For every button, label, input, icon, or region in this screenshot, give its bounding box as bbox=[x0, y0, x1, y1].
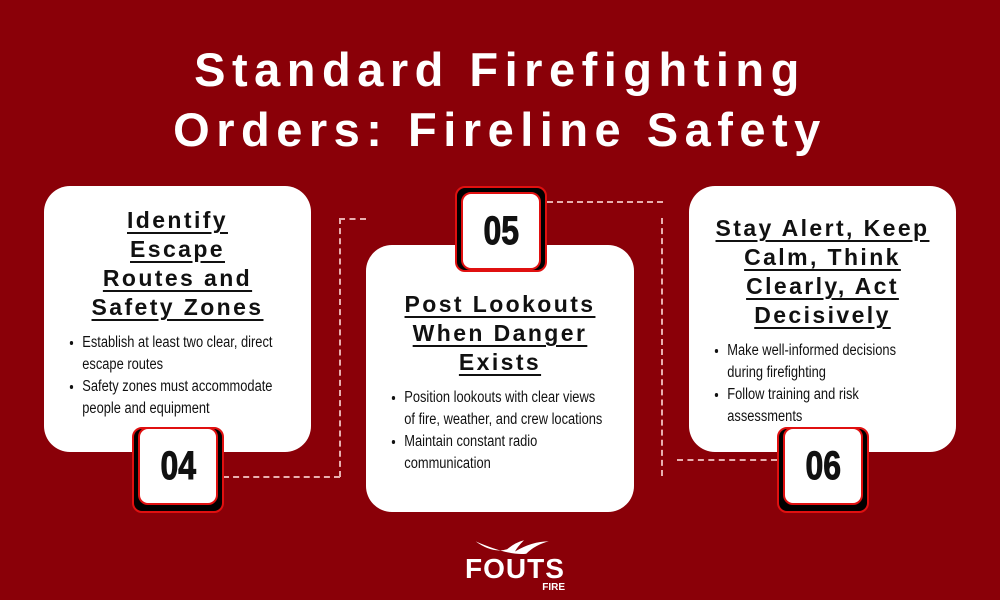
heading 06: Stay Alert, Keep bbox=[716, 215, 929, 241]
bullets 04: Establish at least two clear, direct escape routes bbox=[82, 334, 272, 373]
heading 05: Exists bbox=[459, 349, 541, 375]
bullets 04 bbox=[70, 334, 272, 417]
heading 04: Identify bbox=[127, 207, 228, 233]
bullets 05: Position lookouts with clear views of fire, weather, and crew locations bbox=[404, 389, 602, 428]
heading 04: Escape bbox=[130, 236, 225, 262]
heading 06: Decisively bbox=[754, 302, 891, 328]
number 06 bbox=[777, 427, 869, 513]
panel: card 04 bbox=[44, 186, 311, 452]
logo: FIRE bbox=[542, 582, 565, 593]
panel: card 05 bbox=[366, 245, 634, 512]
bullets 06 bbox=[714, 342, 896, 425]
logo bbox=[465, 540, 565, 593]
number 06: 06 bbox=[805, 444, 841, 488]
title: Standard Firefighting bbox=[194, 43, 806, 96]
number 05: 05 bbox=[483, 209, 519, 253]
logo: FOUTS bbox=[465, 553, 565, 584]
heading 04 bbox=[92, 207, 264, 321]
heading 06 bbox=[716, 215, 930, 329]
bullets 06: Follow training and risk assessments bbox=[727, 386, 859, 425]
title: Orders: Fireline Safety bbox=[173, 103, 827, 156]
panel: card 06 bbox=[689, 186, 956, 452]
heading 04: Routes and bbox=[103, 265, 252, 291]
heading 04: Safety Zones bbox=[92, 294, 263, 320]
title bbox=[173, 43, 827, 156]
number 05 bbox=[455, 186, 547, 272]
heading 06: Clearly, Act bbox=[746, 273, 899, 299]
number 04 bbox=[132, 427, 224, 513]
bullets 05 bbox=[392, 389, 602, 472]
bullets 05: Maintain constant radio communication bbox=[404, 433, 537, 472]
heading 05: Post Lookouts bbox=[405, 291, 595, 317]
heading 05 bbox=[404, 291, 596, 376]
heading 06: Calm, Think bbox=[744, 244, 901, 270]
bullets 04: Safety zones must accommodate people and equipment bbox=[82, 378, 272, 417]
heading 05: When Danger bbox=[413, 320, 587, 346]
bullets 06: Make well-informed decisions during firefighting bbox=[727, 342, 896, 381]
number 04: 04 bbox=[160, 444, 196, 488]
